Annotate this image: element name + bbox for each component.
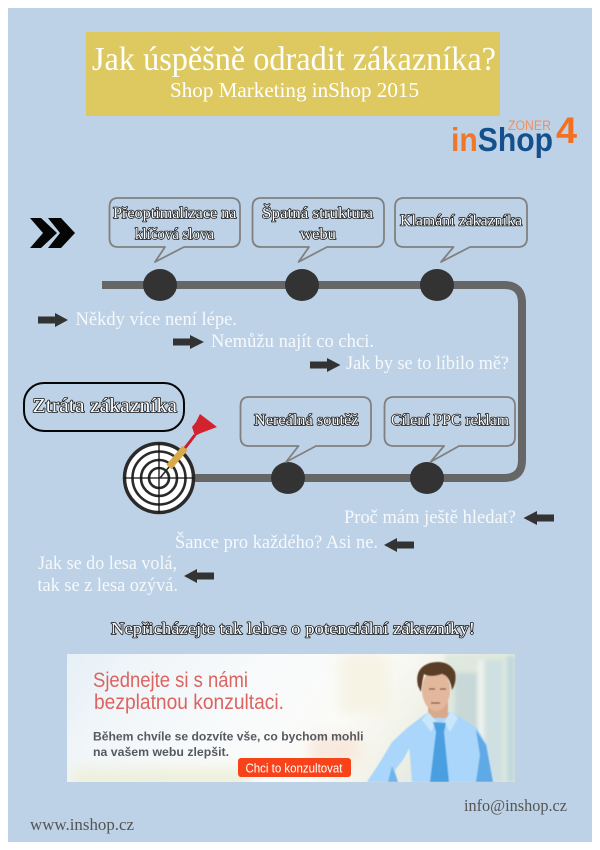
banner headline: Sjednejte si s námi [93,669,248,692]
banner: consultation: na vašem webu zlepšit. [93,745,229,759]
bubble: Cílení PPC reklam [384,397,515,462]
outcome box: Ztráta zákazníka [24,383,184,431]
closing message: Nepřicházejte tak lehce o potenciální zákazníky! [111,619,475,638]
arrow and text: Šance pro každého: Šance pro každého? Asi ne. [175,531,378,553]
arrow and text: Jak se do lesa volá: tak se z lesa ozývá. [38,576,178,596]
bubble: Špatná struktura webu: webu [300,226,336,243]
icon: start chevrons [30,218,75,248]
logo: Zoner inShop 4: ZONER [508,118,551,133]
banner body text: Během chvíle se dozvíte vše, co bychom mohli [93,730,364,744]
arrow and text: Jak by se to líbilo mě: Jak by se to líbilo mě? [346,354,509,374]
timeline track [102,285,522,478]
dart [160,414,217,478]
subtitle: Shop Marketing inShop 2015 [170,78,419,102]
title banner [86,32,500,116]
bubble: Přeoptimalizace na klíčová slova: klíčová slova [135,226,214,243]
logo: Zoner inShop 4: inShop [451,121,553,158]
photo: man in blue shirt [367,662,493,782]
bubble: Nereálná soutěž: Nereálná soutěž [254,412,359,429]
banner: consultation: bezplatnou konzultaci. [94,691,284,714]
bubble: Klamání zákazníka [395,198,527,262]
logo: Zoner inShop 4: 4 [556,110,577,151]
arrow and text: Jak se do lesa volá: Jak se do lesa volá, [38,554,177,574]
banner button: Chci to konzultovat [246,761,343,775]
bubble: Přeoptimalizace na klíčová slova: Přeoptimalizace na [113,205,237,222]
bubble: Přeoptimalizace na klíčová slova [110,198,240,262]
outcome box: Ztráta zákazníka: Ztráta zákazníka [32,395,177,417]
banner button [238,758,351,777]
arrow and text: Nemůžu najít co chci: Nemůžu najít co chci. [211,332,374,352]
bubble: Špatná struktura webu [252,198,384,262]
bubble: Cílení PPC reklam: Cílení PPC reklam [391,412,509,429]
icon: target with dart [124,414,217,513]
banner photo background [70,654,515,792]
website: www.inshop.cz [30,815,134,834]
timeline nodes [143,269,454,494]
arrow and text: Někdy více není lépe: Někdy více není lépe. [76,310,237,330]
bubble: Nereálná soutěž [240,397,371,462]
bubble: Špatná struktura webu: Špatná struktura [262,205,373,222]
contact email: info@inshop.cz [464,796,567,815]
title: Jak úspěšně odradit zákazníka? [92,41,496,78]
bubble: Klamání zákazníka: Klamání zákazníka [400,212,522,230]
logo: Zoner inShop 4 [451,110,577,158]
banner: consultation [67,654,515,792]
arrow and text: Proč mám ještě hledat: Proč mám ještě hledat? [344,508,516,528]
arrow and text: Jak se do lesa volá [38,554,214,596]
